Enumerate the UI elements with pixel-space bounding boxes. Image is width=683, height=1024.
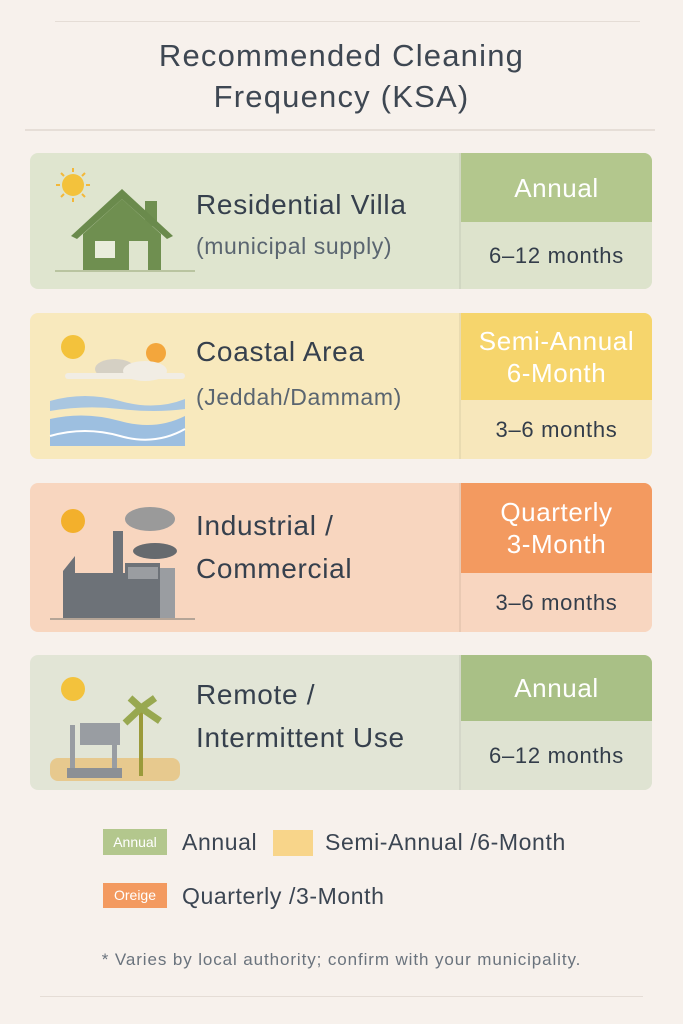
frequency: annual: 6–12 months — [489, 242, 624, 268]
top divider — [55, 21, 640, 22]
panel: industrial — [30, 483, 652, 632]
label: industrial: Industrial / — [196, 510, 334, 541]
panel: remote — [30, 655, 652, 790]
frequency: quarterly: 3-Month — [507, 529, 606, 559]
label: industrial: Commercial — [196, 553, 352, 584]
panel: residential villa — [30, 153, 652, 289]
legend: annual — [103, 829, 167, 855]
icon: sun clouds waves — [50, 335, 186, 446]
frequency: annual — [459, 655, 652, 790]
icon: factory — [50, 507, 195, 620]
icon: well and palm — [50, 677, 180, 781]
panel: coastal area — [30, 313, 652, 459]
label: coastal area: Coastal Area — [196, 336, 365, 367]
frequency: quarterly — [459, 483, 652, 632]
frequency: annual: 6–12 months — [489, 742, 624, 768]
icon: house with sun — [55, 168, 195, 272]
frequency: semi-annual: 6-Month — [507, 358, 606, 388]
legend — [103, 829, 566, 909]
label: residential villa: (municipal supply) — [196, 233, 392, 259]
legend: quarterly: Oreige — [114, 887, 156, 903]
label: coastal area: (Jeddah/Dammam) — [196, 384, 402, 410]
label: remote — [196, 679, 405, 753]
frequency: annual: Annual — [514, 673, 599, 703]
legend: annual: Annual — [113, 834, 157, 850]
label: industrial — [196, 510, 352, 584]
footnote: * Varies by local authority; confirm with your municipality. — [102, 950, 581, 969]
label: residential villa: Residential Villa — [196, 189, 407, 220]
title: Recommended Cleaning — [159, 38, 524, 73]
label: remote: Remote / — [196, 679, 315, 710]
legend: Quarterly /3-Month — [182, 883, 385, 909]
frequency: semi-annual — [459, 313, 652, 459]
title: Frequency (KSA) — [214, 79, 469, 114]
legend: semi-annual — [273, 830, 313, 856]
frequency: annual: Annual — [514, 172, 599, 202]
title — [159, 38, 524, 114]
legend: Annual — [182, 829, 257, 855]
legend: Semi-Annual /6-Month — [325, 829, 566, 855]
label: residential villa — [196, 189, 407, 259]
label: remote: Intermittent Use — [196, 722, 405, 753]
frequency: annual — [459, 153, 652, 289]
legend: quarterly — [103, 883, 167, 908]
label: coastal area — [196, 336, 402, 410]
frequency: quarterly: Quarterly — [500, 497, 613, 527]
frequency: quarterly: 3–6 months — [496, 590, 617, 614]
frequency: semi-annual: Semi-Annual — [479, 326, 634, 356]
frequency: semi-annual: 3–6 months — [496, 416, 617, 442]
